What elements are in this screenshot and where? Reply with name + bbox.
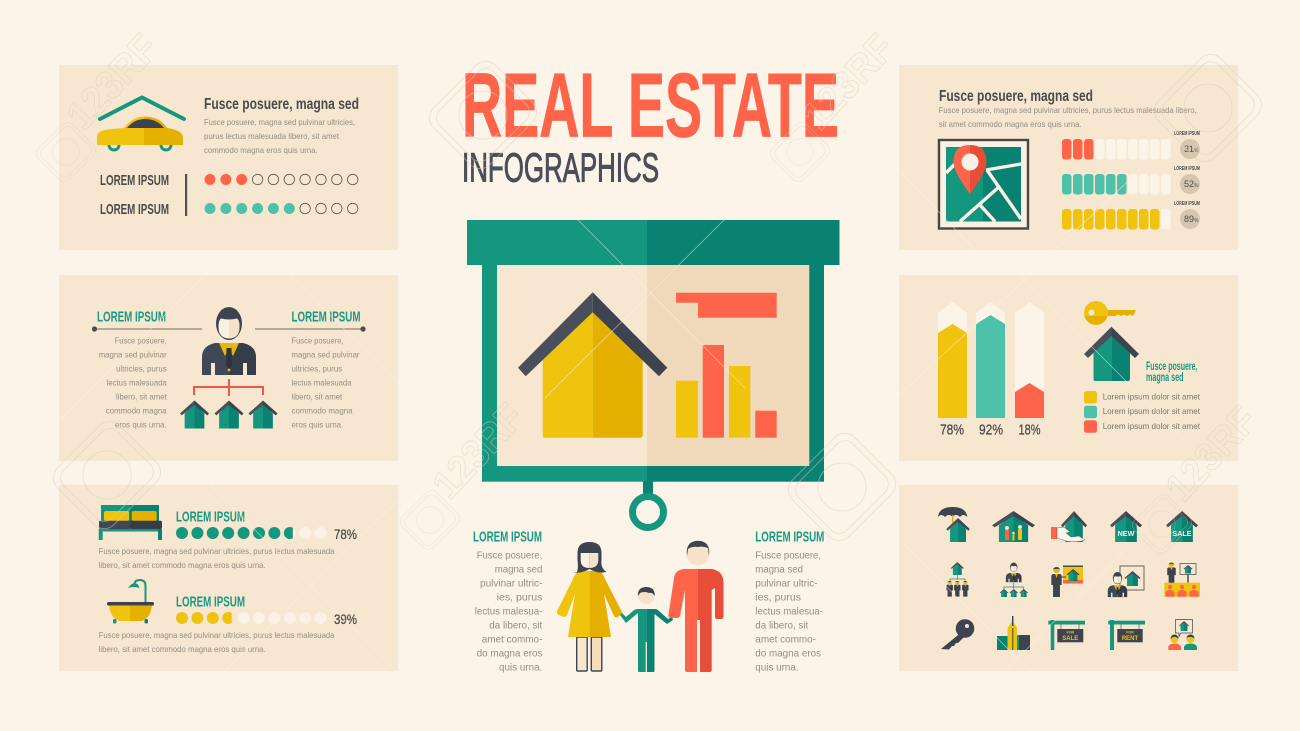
text block: left column: lectus malesuada — [107, 378, 167, 388]
text block: map panel — [939, 105, 1197, 129]
figure: father — [668, 541, 724, 672]
text block: left column: libero, sit amet — [116, 392, 167, 402]
heading: car panel: Fusce posuere, magna sed — [204, 96, 359, 113]
text block: family left: pulvinar ultric- — [480, 578, 543, 590]
text block: bath: libero, sit amet commodo magna eros quis urna. — [99, 644, 266, 654]
value: 18 percent: 18% — [1018, 422, 1040, 438]
icon: house and team — [946, 562, 969, 597]
text block: family left: magna sed — [495, 564, 543, 576]
icon: three houses — [180, 400, 278, 428]
legend: Lorem ipsum dolor sit amet — [1103, 392, 1201, 402]
icon: presenter with board — [1051, 566, 1083, 597]
projector screen — [467, 220, 840, 528]
heading: family left: LOREM IPSUM — [473, 528, 542, 546]
icon: for rent sign: RENT — [1122, 636, 1138, 642]
icon: for sale sign: SALE — [1062, 636, 1078, 642]
callout bar — [676, 293, 777, 318]
text block: right column: magna sed pulvinar — [292, 350, 360, 360]
value: 78 percent: 78% — [940, 422, 964, 438]
figure: mother — [557, 542, 622, 671]
text: 123RF — [424, 395, 533, 507]
text block: right column: ultricies, purus — [292, 364, 342, 374]
stat: 89 percent: LOREM IPSUM — [1174, 201, 1200, 207]
text block: map panel: Fusce posuere, magna sed pulvinar ultricies, purus lectus malesuada libero, — [939, 105, 1197, 115]
dot rating: teal — [204, 203, 358, 214]
panel: agent and houses — [59, 275, 398, 461]
dot meter: 39 percent — [176, 612, 327, 624]
illustration: family — [557, 541, 724, 672]
label: rating two: LOREM IPSUM — [100, 201, 169, 218]
text block: map panel: sit amet commodo magna eros quis urna. — [939, 119, 1082, 129]
dot rating: coral — [204, 174, 358, 185]
stat: 31 percent: LOREM IPSUM — [1174, 131, 1200, 137]
stat: 31 percent: 31% — [1184, 144, 1199, 154]
icon: couple talking about a house — [1168, 620, 1197, 650]
icon: bed — [99, 505, 162, 540]
panel: bed and bath — [59, 485, 398, 671]
text block: family right: amet commo- — [755, 634, 816, 646]
text block: left column: commodo magna — [106, 406, 167, 416]
text block: family left: lectus malesua- — [475, 606, 543, 618]
text: 123RF — [794, 26, 903, 138]
text block: family right: do magna eros — [755, 648, 821, 660]
text block: family right — [755, 550, 823, 674]
text block: car panel body — [204, 117, 355, 155]
icon: family house — [992, 511, 1035, 542]
text block: family right: magna sed — [755, 564, 803, 576]
icon: agent — [202, 307, 256, 375]
heading: left lorem ipsum: LOREM IPSUM — [97, 308, 166, 326]
label: rating one: LOREM IPSUM — [100, 172, 169, 189]
text block: right column: eros quis urna. — [292, 420, 343, 430]
stat: 52 percent: LOREM IPSUM — [1174, 166, 1200, 172]
panel: location map bars — [899, 65, 1238, 250]
icon: for rent sign — [1108, 620, 1145, 650]
text block: family right: ies, purus — [755, 592, 801, 604]
bar chart — [676, 345, 777, 438]
stat: 52 percent: 52% — [1184, 179, 1199, 189]
text block: family right: Fusce posuere, — [755, 550, 821, 562]
figure: child — [620, 587, 673, 672]
icon: sale house: SALE — [1172, 529, 1192, 538]
text block: family left — [475, 550, 543, 674]
icon: presentation audience — [1164, 562, 1200, 597]
icon: large house — [518, 292, 667, 438]
icon: dark key — [941, 619, 974, 650]
heading: bath: LOREM IPSUM — [176, 594, 245, 610]
panel: arrow bars and key — [899, 275, 1238, 461]
text block: family left: da libero, sit — [489, 620, 542, 632]
text block: left column: eros quis urna. — [115, 420, 167, 430]
text block: right column: lectus malesuada — [292, 378, 352, 388]
text: 123RF — [58, 26, 167, 138]
text block: bed: Fusce posuere, magna sed pulvinar ultricies, purus lectus malesuada — [99, 546, 335, 556]
text block: family left: do magna eros — [477, 648, 542, 660]
subtitle: INFOGRAPHICS — [462, 144, 659, 190]
icon: car in garage — [97, 98, 184, 152]
heading: family right: LOREM IPSUM — [755, 528, 824, 546]
chart: arrow bars — [938, 302, 1044, 418]
heading: map panel: Fusce posuere, magna sed — [939, 88, 1093, 105]
icon: for sale sign: FOR — [1067, 630, 1074, 634]
text block: family right: da libero, sit — [755, 620, 808, 632]
text: 123RF — [1157, 398, 1266, 510]
text block: car panel body: purus lectus malesuada libero, sit amet — [204, 131, 340, 141]
icon: city buildings — [997, 616, 1030, 650]
text block: right column — [292, 336, 360, 430]
icon: new house — [1110, 511, 1142, 542]
stat: 89 percent — [1174, 201, 1200, 229]
text block: left column: Fusce posuere, — [115, 336, 167, 346]
text block: family right: lectus malesua- — [755, 606, 823, 618]
text block: family left: ies, purus — [497, 592, 542, 604]
text block: car panel body: Fusce posuere, magna sed pulvinar ultricies, — [204, 117, 355, 127]
icon: for rent sign: FOR — [1126, 630, 1134, 634]
dot meter: 78 percent — [176, 527, 327, 539]
heading: right lorem ipsum: LOREM IPSUM — [292, 308, 360, 326]
icon: house in hand — [1051, 511, 1087, 542]
text block: bath — [99, 630, 335, 654]
text block: bed — [99, 546, 335, 570]
legend: Lorem ipsum dolor sit amet — [1103, 406, 1201, 416]
icon: map with pin — [939, 140, 1028, 228]
org connector — [194, 379, 263, 396]
icon: sale house — [1166, 511, 1198, 542]
value: 92 percent: 92% — [979, 422, 1003, 438]
icon: gold key — [1084, 301, 1136, 325]
text block: family right: quis urna. — [755, 662, 799, 674]
heading: bed: LOREM IPSUM — [176, 508, 245, 526]
text block: family right: pulvinar ultric- — [755, 578, 818, 590]
text block: right column: libero, sit amet — [292, 392, 343, 402]
icon: umbrella house — [938, 507, 970, 542]
legend — [1084, 391, 1201, 433]
icon: teal house — [1084, 327, 1139, 381]
icon: agent with house board — [1108, 566, 1144, 597]
icon: new house: NEW — [1118, 529, 1135, 538]
icon: for sale sign — [1048, 620, 1085, 650]
text block: car panel body: commodo magna eros quis urna. — [204, 145, 318, 155]
text block: family left: Fusce posuere, — [477, 550, 542, 562]
legend: Lorem ipsum dolor sit amet — [1103, 421, 1201, 431]
progress bars: 31 percent — [1062, 139, 1170, 160]
heading: house caption — [1146, 361, 1198, 384]
heading: house caption: magna sed — [1146, 372, 1184, 384]
text block: right column: commodo magna — [292, 406, 353, 416]
value: 39 percent: 39% — [334, 611, 357, 627]
stat: 52 percent — [1174, 166, 1200, 194]
text block: bath: Fusce posuere, magna sed pulvinar ultricies, purus lectus malesuada — [99, 630, 335, 640]
text block: family left: quis urna. — [499, 662, 542, 674]
stat: 31 percent — [1174, 131, 1200, 159]
progress bars: 52 percent — [1062, 174, 1170, 194]
icon: bathtub — [107, 580, 154, 624]
heading: house caption: Fusce posuere, — [1146, 361, 1198, 373]
text block: left column: ultricies, purus — [116, 364, 167, 374]
text block: right column: Fusce posuere, — [292, 336, 344, 346]
panel: icon set — [899, 485, 1238, 671]
stat: 89 percent: 89% — [1184, 214, 1199, 224]
screen pull handle — [632, 481, 664, 528]
text block: bed: libero, sit amet commodo magna eros quis urna. — [99, 560, 266, 570]
text block: left column — [99, 336, 167, 430]
text block: family left: amet commo- — [482, 634, 543, 646]
value: 78 percent: 78% — [334, 526, 357, 542]
text block: left column: magna sed pulvinar — [99, 350, 167, 360]
progress bars: 89 percent — [1062, 209, 1170, 230]
icon: agent with houses — [1000, 562, 1028, 597]
title: REAL ESTATE — [462, 56, 839, 156]
panel: car garage rating — [59, 65, 398, 250]
